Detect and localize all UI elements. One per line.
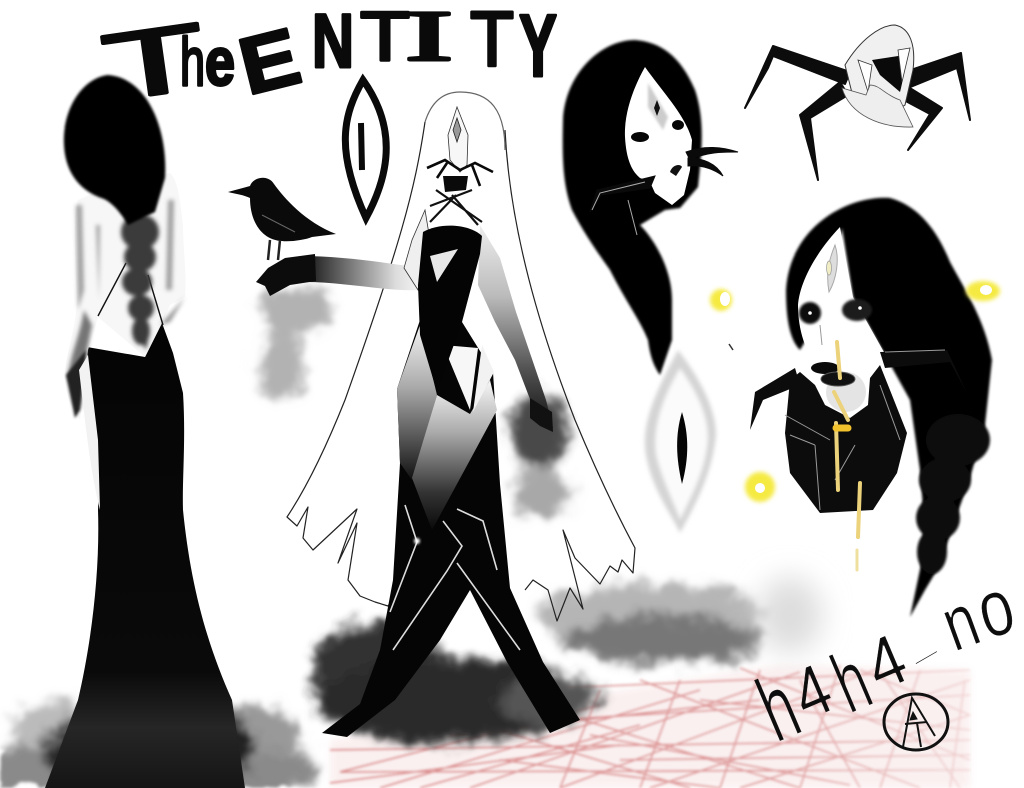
hair bbox=[786, 198, 992, 617]
face spider bbox=[427, 160, 493, 186]
signature: h4h4_no: h bbox=[744, 655, 813, 761]
back leg sliver bbox=[79, 355, 100, 510]
center figure: cape bbox=[287, 92, 635, 621]
orb left bbox=[710, 289, 732, 311]
chest V cutout bbox=[430, 249, 458, 282]
back cross straps bbox=[98, 263, 163, 325]
back skin bbox=[65, 173, 186, 420]
braid bbox=[121, 214, 159, 350]
hand under raven bbox=[256, 254, 316, 296]
center black dress panel bbox=[418, 226, 482, 392]
ragged right hand bbox=[530, 398, 553, 432]
smoke: bottom left under back figure bbox=[0, 700, 315, 788]
spider leg highlight bbox=[592, 182, 645, 235]
yellow drip bbox=[834, 342, 860, 570]
right arm bbox=[478, 225, 553, 428]
head sketch: top center bbox=[563, 40, 738, 375]
right hip panel bbox=[473, 345, 494, 412]
eye symbol soft bbox=[645, 350, 716, 533]
eye symbol outline bbox=[345, 80, 386, 218]
signature: h4h4_no: n bbox=[931, 577, 990, 668]
mouth upper shell bbox=[845, 25, 914, 120]
face bbox=[448, 107, 468, 172]
back hand bbox=[66, 350, 86, 418]
left thigh gradient bbox=[397, 325, 437, 480]
signature: h4h4_no: _ bbox=[896, 617, 940, 668]
third eye bbox=[453, 118, 461, 142]
stray mark bbox=[729, 344, 733, 350]
smoke: base of center figure bbox=[313, 583, 765, 742]
signature: h4h4_no: 4 bbox=[781, 649, 844, 736]
mouth spider legs bbox=[590, 147, 738, 212]
eyeball cup bbox=[826, 372, 866, 412]
neck bbox=[443, 176, 468, 192]
chest straps bbox=[430, 190, 482, 225]
eyes bbox=[799, 302, 821, 324]
title letter N: N bbox=[312, 0, 354, 84]
lips bbox=[811, 362, 839, 374]
lips bbox=[670, 165, 682, 176]
title: The ENTITY bbox=[96, 0, 557, 121]
third eye bbox=[828, 245, 837, 292]
title letter E: E bbox=[231, 11, 308, 111]
third eye bbox=[648, 83, 668, 130]
hair and braid bbox=[563, 40, 702, 375]
raven on hand bbox=[228, 178, 336, 260]
tongue bbox=[842, 85, 913, 127]
background: red scribbled floor bbox=[330, 665, 970, 788]
white seam lines bbox=[390, 505, 520, 650]
face bbox=[798, 227, 885, 372]
braid lumps bbox=[916, 414, 990, 574]
signature emblem bbox=[884, 694, 948, 750]
outstretched arm bbox=[300, 256, 420, 290]
nose line bbox=[820, 325, 822, 345]
face bbox=[625, 67, 692, 205]
center thigh gradient bbox=[412, 380, 497, 530]
signature: h4h4_no bbox=[744, 561, 1023, 761]
back skin shading bbox=[68, 200, 185, 410]
center figure: body bbox=[256, 107, 580, 737]
third eye slit bbox=[654, 100, 660, 116]
spider legs bbox=[750, 350, 967, 430]
title letter e: e bbox=[205, 24, 235, 100]
back dress lower skirt bbox=[45, 323, 245, 788]
spider highlights bbox=[785, 350, 945, 510]
orb right bbox=[966, 281, 1000, 301]
smoke: behind center figure hip bbox=[508, 396, 570, 518]
smoke: under raven perch bbox=[259, 284, 331, 403]
lower body silhouette bbox=[322, 320, 580, 737]
fangs bbox=[858, 48, 910, 92]
title letter T: T bbox=[96, 3, 212, 121]
eyes bbox=[631, 132, 649, 142]
third eye inner bbox=[826, 261, 832, 275]
seam sparkle bbox=[414, 538, 420, 544]
torso left skin bbox=[404, 210, 430, 290]
background: pale floor wash bbox=[330, 665, 970, 788]
legs bbox=[745, 46, 970, 180]
hair bbox=[64, 75, 165, 225]
spider with fanged mouth bbox=[745, 25, 970, 180]
cup rim bbox=[821, 372, 855, 386]
title letter h: h bbox=[180, 24, 205, 100]
spider body bbox=[785, 365, 907, 513]
white diamond panel bbox=[443, 345, 478, 410]
orb lower bbox=[745, 472, 775, 502]
head sketch: right with glowing eye bbox=[750, 198, 992, 617]
signature: h4h4_no: h bbox=[819, 632, 884, 731]
back-view figure bbox=[45, 75, 245, 788]
smoke: pale haze at right edge bbox=[758, 577, 822, 653]
glow orbs bbox=[710, 281, 1000, 502]
mouth cavity bbox=[872, 55, 905, 92]
signature: h4h4_no: 4 bbox=[854, 619, 918, 707]
